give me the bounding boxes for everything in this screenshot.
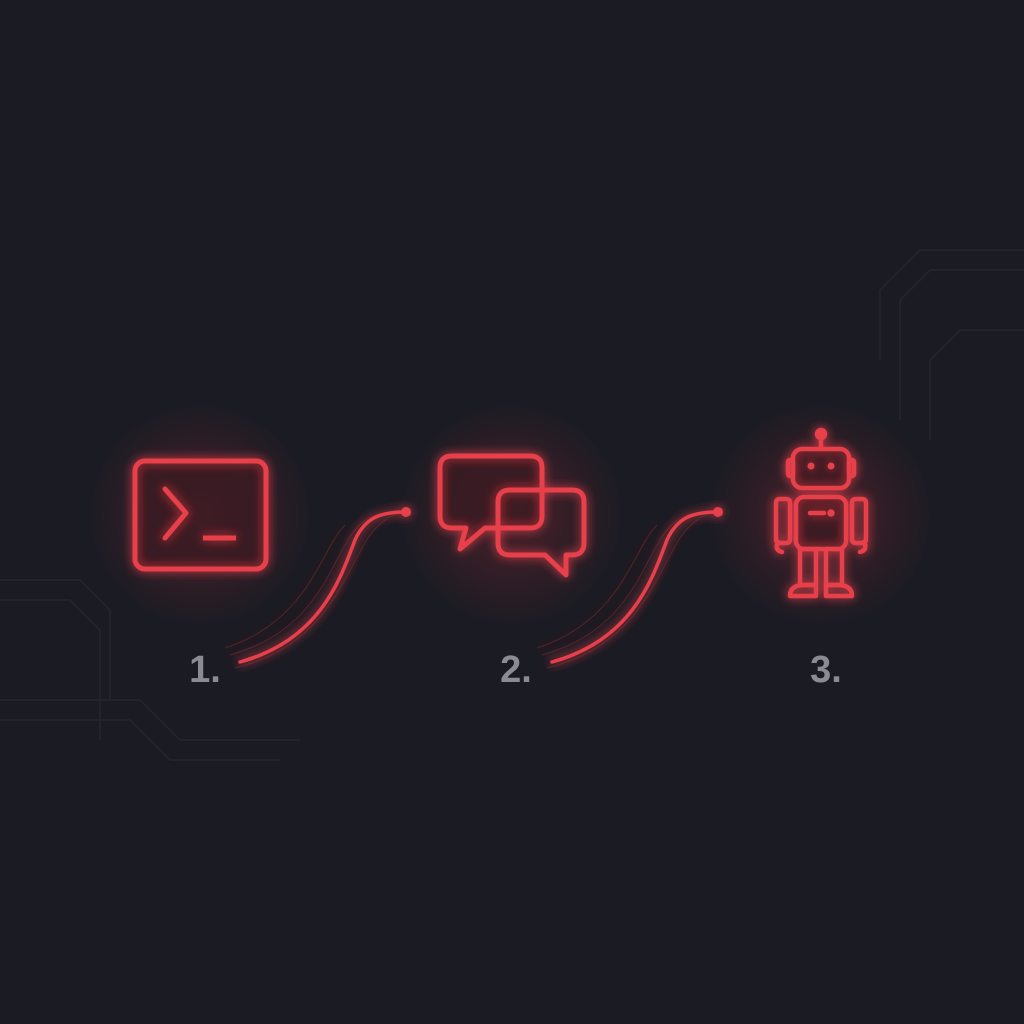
label: step 3: 3. (810, 649, 842, 691)
arrow: connector 2 (537, 507, 723, 668)
label: step 2: 2. (500, 649, 532, 691)
icon: robot (776, 430, 866, 596)
label: step 1: 1. (189, 649, 221, 691)
arrow: connector 1 (225, 507, 411, 668)
icon: terminal (135, 461, 266, 569)
halos (85, 400, 936, 630)
icon: chat bubbles (440, 456, 584, 575)
